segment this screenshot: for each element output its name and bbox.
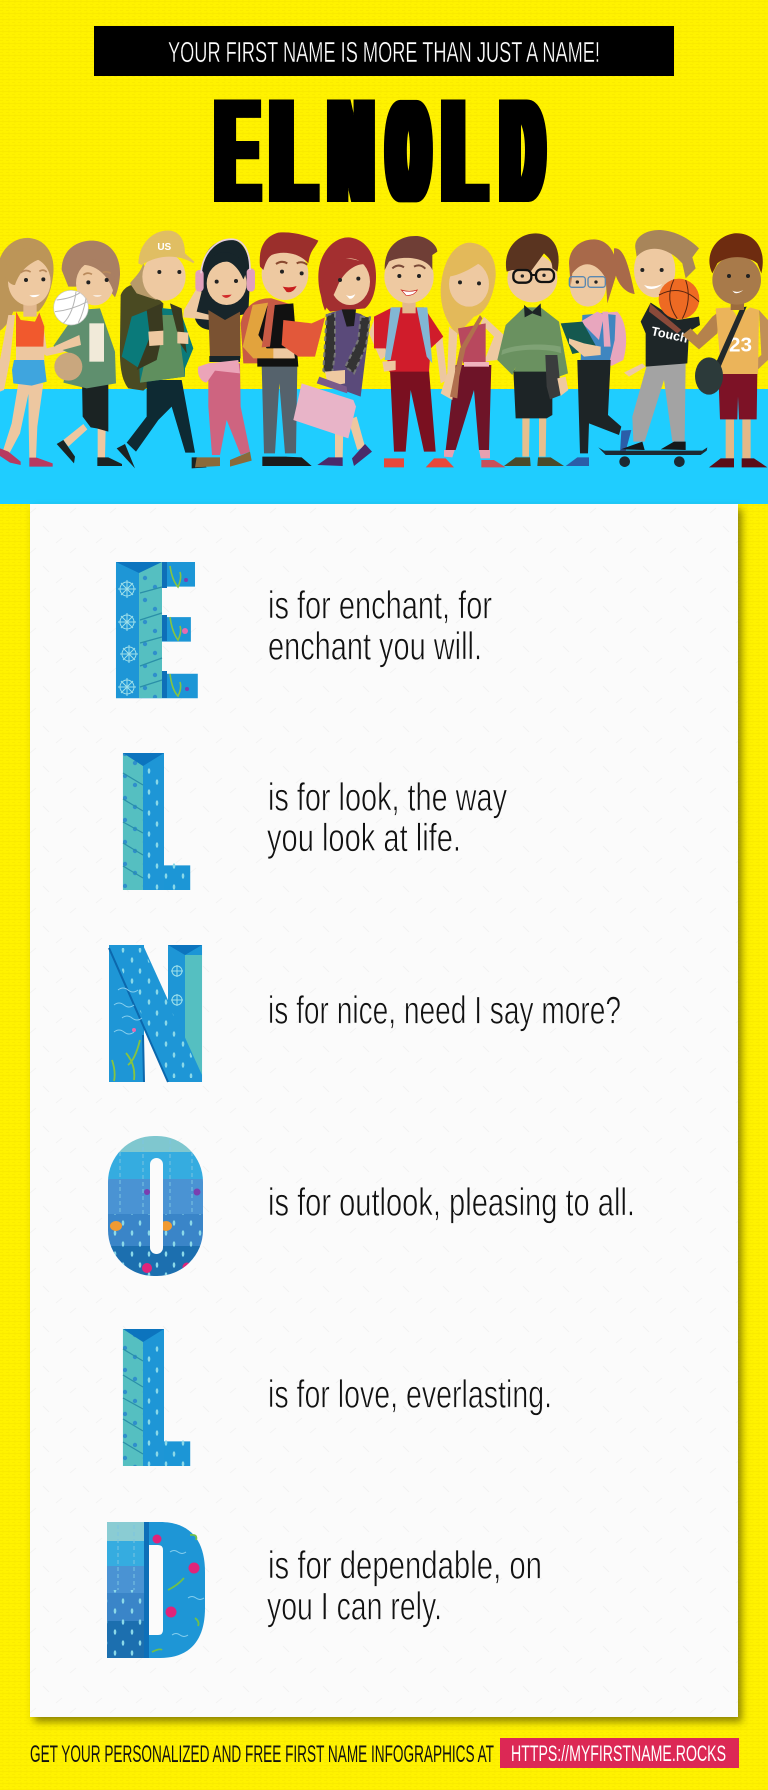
title: ELNOLD	[216, 68, 542, 233]
text: enchant	[268, 584, 492, 668]
person 12: boy with curly hair, number 23 jersey and shoulder bag	[682, 233, 768, 467]
person 2: girl in green jacket with volleyball	[53, 241, 122, 466]
illustration: group of twelve young people, left half	[0, 231, 376, 468]
letter D illustration: D	[99, 1481, 209, 1697]
text: dependable: is for dependable, on	[268, 1544, 542, 1587]
person 9: boy in glasses with green sweater and shorts	[497, 233, 568, 466]
letter N illustration: N	[101, 904, 210, 1122]
person 6: girl with red bob and pink bag	[293, 237, 376, 466]
letter L illustration: L	[117, 712, 192, 930]
person 12: boy with curly hair, number 23 jersey and shoulder bag: 23	[729, 334, 752, 357]
text: dependable: you I can rely.	[267, 1585, 442, 1628]
text: look	[267, 777, 508, 860]
person 3: hiker with cap and backpack: US	[157, 242, 172, 253]
person 1: girl in orange top	[0, 238, 80, 467]
letter O illustration: O	[105, 1098, 206, 1313]
person 11: skateboarder with basketball: Touch	[650, 324, 689, 346]
skateboard	[598, 447, 707, 467]
text: love: is for love, everlasting.	[268, 1374, 552, 1417]
white content panel	[30, 504, 738, 1717]
person 4: girl with black hair and pink headphones	[183, 239, 255, 467]
title: ELNOLD: O	[390, 73, 427, 231]
text: nice: is for nice, need I say more?	[268, 989, 621, 1032]
person 7: boy in red tee with blue backpack straps	[369, 236, 454, 467]
letter O illustration	[108, 1136, 203, 1276]
person 5: boy reading a red book	[241, 232, 325, 466]
person 10: girl with ponytail, tablet and pink backpack	[561, 239, 635, 466]
letter L illustration, second: L	[117, 1288, 192, 1506]
title: ELNOLD: L	[272, 70, 314, 233]
person 3: hiker with cap and backpack	[117, 231, 207, 468]
person 11: skateboarder with basketball	[598, 230, 707, 467]
text: enchant: is for enchant, for	[268, 584, 492, 627]
title: ELNOLD: N	[330, 68, 372, 233]
illustration: group of twelve young people, right half	[369, 230, 768, 467]
text: dependable	[267, 1544, 542, 1628]
title: ELNOLD: E	[216, 69, 258, 232]
title: ELNOLD: D	[502, 70, 542, 233]
letter E illustration: E	[109, 522, 201, 738]
blue floor band	[0, 389, 768, 504]
text: enchant: enchant you will.	[268, 625, 482, 668]
title: ELNOLD: L	[444, 69, 484, 232]
header banner	[94, 26, 674, 76]
letter D illustration	[107, 1522, 205, 1658]
person 8: blonde girl in pink top	[441, 243, 506, 467]
text: outlook: is for outlook, pleasing to all.	[268, 1182, 635, 1225]
text: look: is for look, the way	[268, 777, 508, 820]
text: look: you look at life.	[267, 817, 461, 860]
